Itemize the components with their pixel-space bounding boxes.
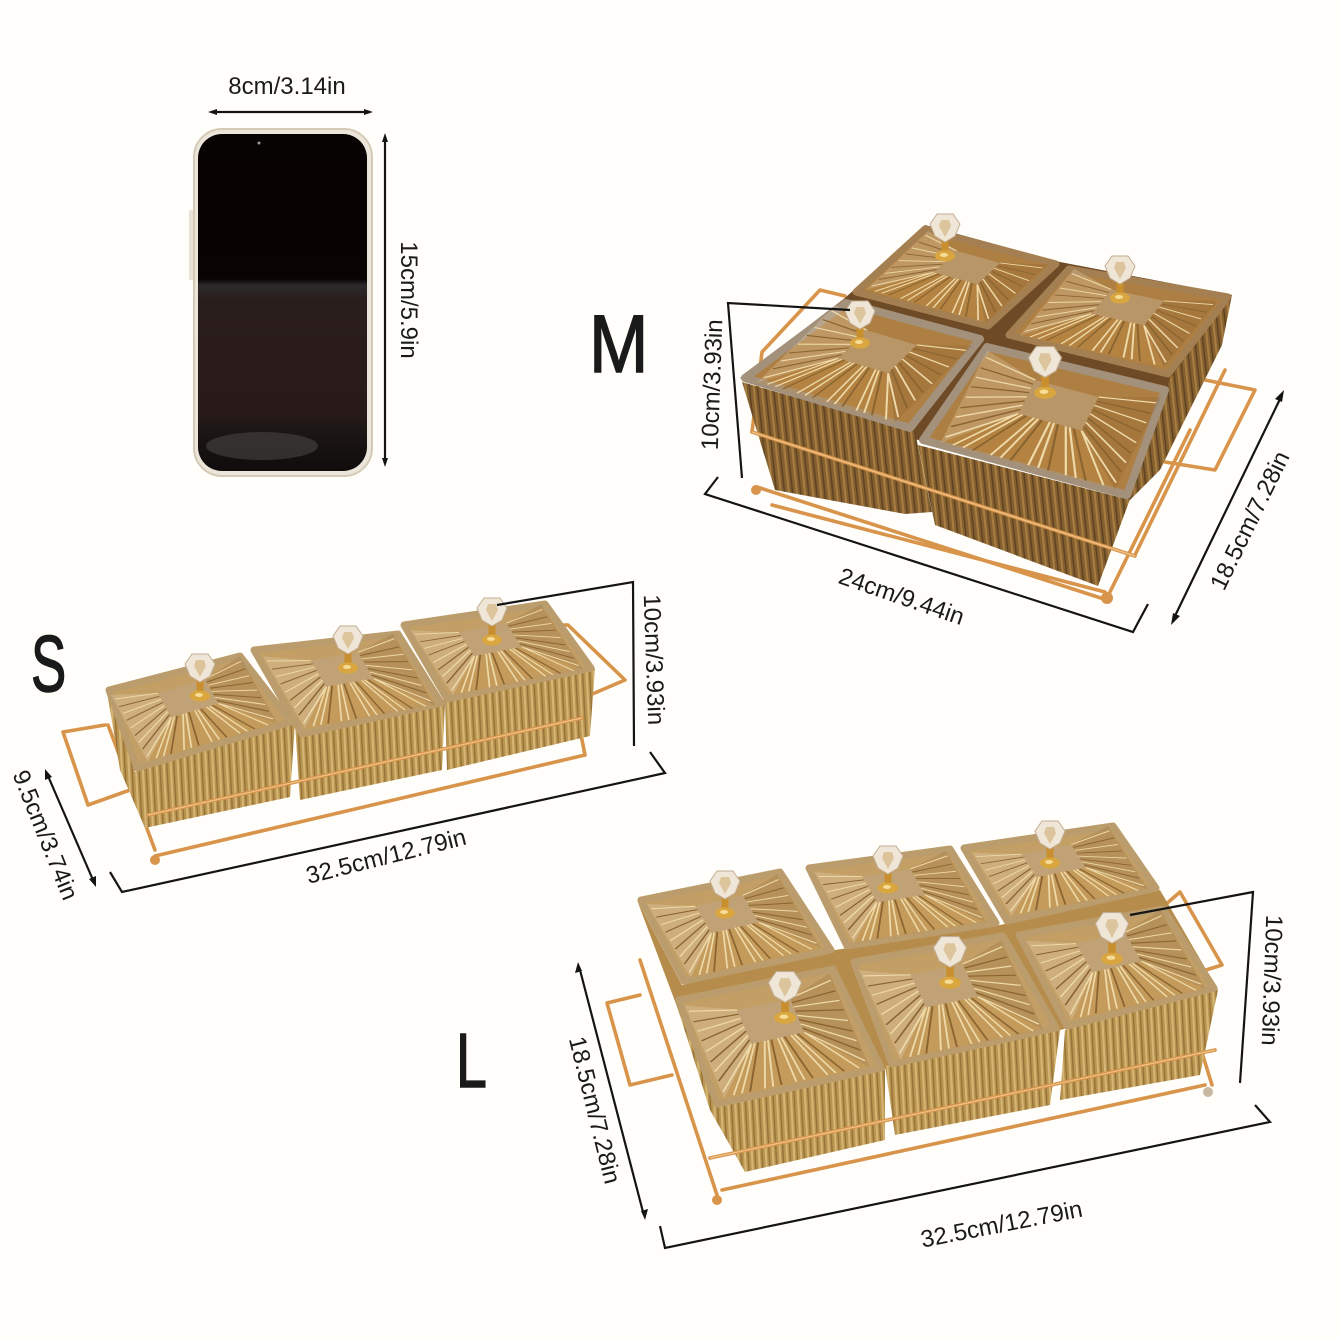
lid back left <box>856 229 1056 326</box>
rack front rail and foot <box>148 718 582 815</box>
label: phone height: 15cm/5.9in <box>395 241 422 359</box>
bowl body front left <box>675 1000 885 1172</box>
dimension: S height <box>497 582 669 746</box>
dimension: L height <box>1130 892 1287 1083</box>
screen reflection <box>206 432 318 460</box>
phone size reference <box>189 129 372 476</box>
lid back right <box>964 826 1156 921</box>
label: M depth: 18.5cm/7.28in <box>1205 447 1295 594</box>
lid front middle <box>854 936 1056 1064</box>
lid front right <box>1019 909 1214 1026</box>
bowl body back right <box>1130 295 1232 500</box>
lid left <box>109 656 291 768</box>
rack back parts <box>752 290 1255 600</box>
bowl body left <box>107 692 295 828</box>
lid back right <box>1009 269 1228 374</box>
gap fill under lids <box>740 225 1232 500</box>
bowl body front right <box>918 388 1170 586</box>
bowl body right <box>445 668 595 770</box>
knobs <box>930 214 960 262</box>
bowl body back row edge <box>637 890 1218 1108</box>
product: size M tray with four bowls <box>740 214 1255 604</box>
label: S height: 10cm/3.93in <box>638 594 669 726</box>
rack front rail and feet <box>752 432 1135 556</box>
label: S depth: 9.5cm/3.74in <box>7 766 83 904</box>
label: S length: 32.5cm/12.79in <box>303 824 469 890</box>
bowl body front middle <box>885 1030 1060 1135</box>
rack back parts <box>607 892 1222 1195</box>
dimension: L depth <box>563 962 648 1220</box>
lid middle <box>254 634 441 734</box>
dimension: phone width <box>208 73 373 115</box>
label: phone width: 8cm/3.14in <box>228 73 346 100</box>
label: L length: 32.5cm/12.79in <box>918 1196 1085 1254</box>
bowl body front right <box>1060 990 1218 1100</box>
dimension: L length <box>660 1105 1270 1254</box>
lid back left <box>641 872 831 981</box>
camera dot <box>258 142 260 144</box>
phone body <box>194 129 372 476</box>
rack back parts <box>63 625 625 856</box>
label: M height: 10cm/3.93in <box>697 319 728 451</box>
size letter M: M <box>589 298 648 390</box>
phone screen <box>198 134 367 471</box>
product: size S tray with three bowls <box>63 598 625 865</box>
label: L height: 10cm/3.93in <box>1256 914 1287 1046</box>
size letter S: S <box>31 620 66 709</box>
dimension: M depth <box>1171 390 1295 625</box>
side button <box>189 210 195 280</box>
bowl body front left <box>742 382 932 514</box>
knobs <box>185 654 215 702</box>
lid right <box>404 604 591 699</box>
label: M length: 24cm/9.44in <box>835 563 968 631</box>
label: L depth: 18.5cm/7.28in <box>563 1034 626 1187</box>
dimension: M length <box>705 477 1148 632</box>
dimension: S depth <box>7 766 96 904</box>
lid front left <box>745 303 980 428</box>
product: size L tray with six bowls <box>607 821 1222 1205</box>
dimension: M height <box>697 303 850 478</box>
bowl body middle <box>295 700 445 800</box>
lid front right <box>923 347 1165 495</box>
dimension: phone height <box>382 133 422 467</box>
size letter L: L <box>456 1018 487 1104</box>
lid front left <box>679 969 881 1104</box>
dimension: S length <box>110 752 665 892</box>
rack front rail and foot <box>710 1050 1215 1158</box>
lid back middle <box>809 849 996 946</box>
knobs <box>710 871 740 918</box>
